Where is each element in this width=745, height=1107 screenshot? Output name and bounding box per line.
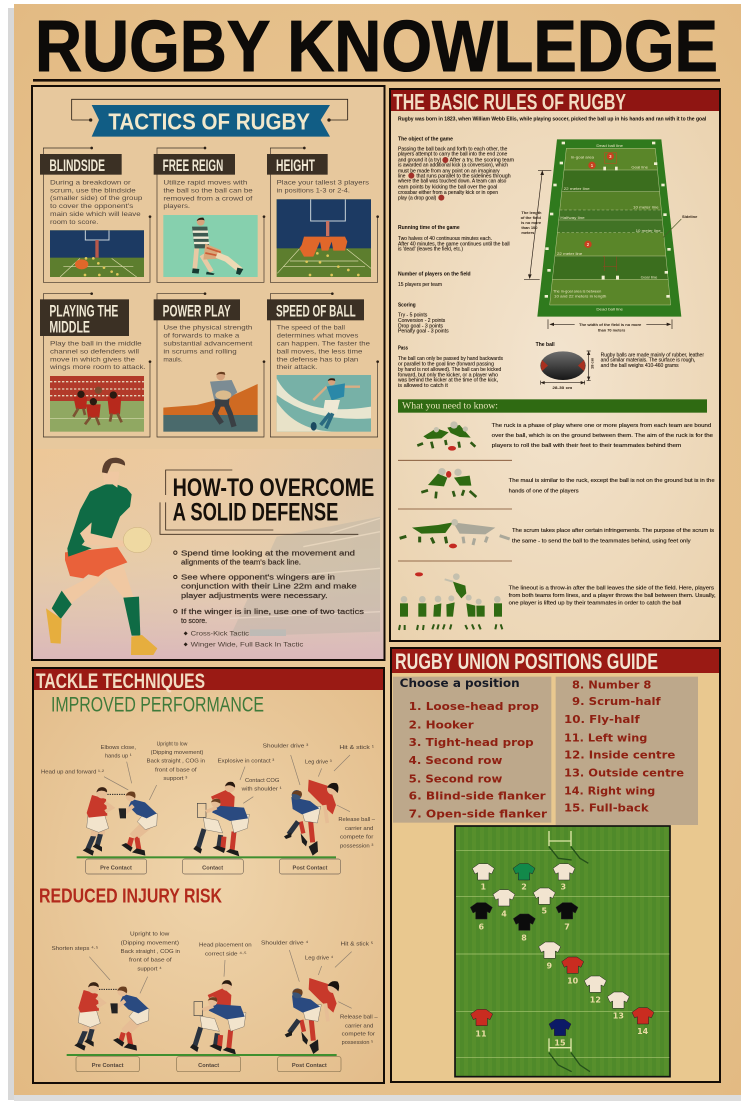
position list 1-7 — [393, 676, 551, 823]
pitch with numbered shirts: 2 — [521, 883, 527, 892]
text: object of the game: that runs parallel to the sidelines through — [416, 173, 511, 179]
diagram: improved performance tackle stages: hands up ¹ — [105, 753, 132, 759]
position list 8-15: 15. Full-back — [564, 801, 649, 814]
card: blindside: scrum, use the blindside — [50, 187, 136, 194]
bullet list: If the winger is in line, use one of two tactics — [181, 607, 364, 616]
diagram: improved performance tackle stages: Release ball – — [338, 817, 375, 823]
header: tackle techniques: TACKLE TECHNIQUES — [36, 670, 205, 693]
text: running time: is 'dead' (leaves the field, etc.) — [398, 247, 463, 253]
heading: how-to overcome: A SOLID DEFENSE — [173, 500, 338, 527]
diagram: improved performance tackle stages: possession ³ — [340, 843, 374, 849]
diagram: reduced injury risk tackle stages: Contact — [198, 1063, 219, 1069]
position list 1-7: 3. Tight-head prop — [409, 736, 534, 749]
text: pass: by hand is not allowed). The ball can be kicked — [398, 367, 501, 373]
position list 8-15: 13. Outside centre — [564, 766, 684, 779]
diagram: reduced injury risk tackle stages: Leg drive ⁴ — [305, 956, 334, 962]
card: power play: substantial advancement — [163, 341, 253, 348]
card: speed of ball: determines what moves — [277, 333, 359, 340]
card: speed of ball: The speed of the ball — [277, 325, 346, 332]
diagram: reduced injury risk tackle stages: Release ball – — [340, 1014, 378, 1020]
text: running time: After 40 minutes, the game continues until the ball — [398, 241, 510, 247]
card: power play: POWER PLAY — [163, 301, 231, 320]
position list 1-7: 7. Open-side flanker — [409, 808, 548, 821]
diagram: improved performance tackle stages: Shoulder drive ³ — [263, 744, 309, 750]
rugby field diagram: 22 meter line — [564, 187, 590, 191]
diagram: reduced injury risk tackle stages: support ⁴ — [137, 966, 162, 972]
position list 1-7: 5. Second row — [409, 772, 502, 785]
text: number of players: Number of players on the field — [398, 272, 471, 278]
rugby field diagram: 10 meter line — [636, 229, 661, 233]
position list 1-7: Choose a position — [400, 676, 520, 690]
diagram: reduced injury risk tackle stages: Head placement on — [199, 943, 252, 949]
panel: rugby union positions guide — [391, 648, 720, 1082]
the ball diagram: and similar materials. The surface is rough, — [601, 358, 695, 364]
heading: reduced injury risk: REDUCED INJURY RISK — [39, 886, 222, 908]
pitch with numbered shirts: 9 — [547, 961, 553, 970]
diagram: improved performance tackle stages: Post Contact — [293, 865, 328, 871]
card: playing the middle: PLAYING THE — [49, 301, 118, 320]
diagram: improved performance tackle stages: Back straight , COG in — [147, 759, 205, 765]
card: blindside: (smaller side) of the group — [50, 195, 143, 202]
rugby field diagram: Goal line — [631, 165, 648, 169]
diagram: improved performance tackle stages: compete for — [340, 835, 374, 841]
image: kicker — [277, 375, 371, 432]
pitch with numbered shirts: 7 — [564, 923, 570, 932]
text: object of the game: players attempt to carry the ball into the end zone — [398, 152, 507, 158]
text: object of the game: line — [398, 173, 405, 179]
pitch with numbered shirts: 3 — [561, 883, 566, 892]
heading: how-to overcome — [160, 470, 374, 534]
position list 8-15: 9. Scrum-half — [572, 695, 661, 708]
rugby field diagram: 2 — [587, 242, 590, 247]
text: object of the game: crossbar either from a penalty kick or in open — [398, 190, 498, 196]
field length annotation: of the field — [521, 215, 541, 220]
text: scoring: Penalty goal - 3 points — [398, 329, 449, 335]
the ball diagram: 28-30 cm — [552, 385, 573, 390]
card: playing the middle: move in which gives the — [50, 356, 135, 363]
image: tackle in open play — [163, 215, 258, 277]
diagram: reduced injury risk tackle stages: possession ⁵ — [342, 1040, 373, 1046]
card: blindside — [40, 147, 151, 282]
card: blindside: During a breakdown or — [50, 179, 132, 186]
card: free reign: the ball so the ball can be — [163, 187, 253, 194]
text: pass: forward, but only the kicker, or a player who — [398, 372, 498, 378]
diagram: reduced injury risk tackle stages: Upright to low — [130, 932, 170, 938]
text: object of the game: where the ball was touched down. A team can also — [398, 179, 506, 185]
rugby field diagram: 10 and 22 meters in length — [554, 294, 606, 298]
tactics banner: TACTICS OF RUGBY — [108, 109, 310, 135]
diagram: reduced injury risk tackle stages: front of base of — [129, 958, 172, 964]
text: scoring: Drop goal - 3 points — [398, 323, 443, 329]
card: blindside: main side which will leave — [50, 211, 141, 218]
text: pass: Pass — [398, 346, 408, 352]
bullet list: Spend time looking at the movement and — [181, 548, 355, 557]
card: free reign: removed from a crowd of — [163, 195, 253, 202]
rugby field diagram: 1 — [591, 163, 594, 168]
pitch with numbered shirts: 15 — [554, 1039, 566, 1048]
rugby field diagram: 3 — [609, 154, 612, 159]
diagram: improved performance tackle stages: carrier and — [345, 826, 373, 832]
the ball diagram: The ball — [536, 342, 555, 348]
text: number of players — [398, 272, 471, 288]
text: object of the game: play (a drop goal) — [398, 195, 437, 201]
rugby field diagram: Halfway line — [560, 216, 585, 220]
scrum — [400, 519, 714, 548]
card: height: Place your tallest 3 players — [277, 179, 370, 186]
pitch with numbered shirts: 1 — [481, 883, 486, 892]
diagram: reduced injury risk tackle stages: Back straight , COG in — [121, 949, 180, 955]
diagram: improved performance tackle stages: support ³ — [163, 776, 188, 782]
the ball diagram: Rugby balls are made mainly of rubber, leather — [601, 352, 704, 358]
bullet list — [174, 548, 364, 649]
field length annotation: The length — [521, 210, 542, 215]
ruck: over the ball, which is on the ground between them. The aim of the ruck is for the — [492, 433, 713, 439]
bullet list: See where opponent's wingers are in — [181, 573, 335, 582]
diagram: reduced injury risk tackle stages: compete for — [342, 1032, 375, 1038]
diagram: reduced injury risk tackle stages — [52, 932, 378, 1072]
bullet list: alignments of the team's back line. — [181, 557, 301, 566]
diagram: reduced injury risk tackle stages: Shoulder drive ⁴ — [261, 940, 309, 946]
card: blindside: to cover the opponent's — [50, 203, 134, 210]
card: height — [267, 147, 379, 282]
position list 1-7: 1. Loose-head prop — [409, 700, 539, 713]
the ball diagram: 18 cm — [590, 357, 595, 369]
rugby field diagram — [537, 139, 681, 317]
text: pass: is allowed to catch it — [398, 383, 449, 389]
what you need to know band — [398, 399, 707, 413]
diagram: reduced injury risk tackle stages: carrier and — [345, 1023, 373, 1029]
card: power play: Use the physical strength — [163, 325, 253, 332]
stadium backdrop — [230, 517, 380, 637]
rugby field diagram: The in-goal area is between — [553, 289, 601, 293]
lineout — [399, 572, 716, 630]
diagram: improved performance tackle stages: Head up and forward ¹·² — [41, 769, 104, 775]
pitch with numbered shirts: 13 — [613, 1011, 624, 1020]
pitch with numbered shirts: 4 — [501, 909, 507, 918]
card: free reign: Utilize rapid moves with — [163, 179, 248, 186]
bullet list: conjunction with their Line 22m and make — [181, 582, 357, 591]
position list 1-7: 2. Hooker — [409, 718, 474, 731]
card: playing the middle — [40, 292, 151, 437]
card: power play — [154, 292, 265, 437]
pitch with numbered shirts — [455, 826, 670, 1077]
rugby field diagram: Dead ball line — [596, 144, 623, 148]
image: ball carrier — [163, 372, 258, 432]
card: speed of ball: can happen. The faster the — [277, 341, 370, 348]
panel: basic rules of rugby — [390, 89, 720, 641]
position list 8-15: 12. Inside centre — [564, 748, 675, 761]
header: positions guide: RUGBY UNION POSITIONS GUIDE — [395, 649, 658, 674]
header: tackle techniques — [34, 669, 383, 693]
header: basic rules: THE BASIC RULES OF RUGBY — [393, 90, 626, 114]
position list 8-15: 11. Left wing — [564, 731, 647, 744]
panel: tactics of rugby — [32, 86, 384, 660]
maul: hands of one of the players — [509, 488, 579, 494]
image: goal line attack — [50, 230, 144, 277]
card: power play: of forwards to make a — [163, 333, 240, 340]
diagram: improved performance tackle stages: Upright to low — [157, 741, 187, 747]
diagram: reduced injury risk tackle stages: Post Contact — [292, 1063, 327, 1069]
pitch with numbered shirts: 10 — [567, 977, 579, 986]
text: object of the game: and ground it (a try) — [398, 157, 442, 163]
scrum: The scrum takes place after certain infringements. The purpose of the scrum is — [512, 528, 714, 534]
text: object of the game — [398, 137, 514, 201]
field length annotation: meters — [521, 230, 535, 235]
position list 8-15: 14. Right wing — [564, 784, 655, 797]
diagram: reduced injury risk tackle stages: Shorten steps ⁴·⁵ — [52, 946, 98, 952]
pitch with numbered shirts: 8 — [521, 933, 527, 942]
lineout: The lineout is a throw-in after the ball leaves the side of the field. Here, players — [509, 586, 714, 592]
card: speed of ball: their attack. — [277, 364, 318, 371]
diagram: improved performance tackle stages: Explosive in contact ³ — [218, 758, 275, 764]
position list 1-7: 4. Second row — [409, 754, 502, 767]
card: power play: mauls. — [163, 356, 183, 363]
diagram: improved performance tackle stages: Leg drive ³ — [305, 759, 332, 765]
field length annotation: than 100 — [521, 225, 538, 230]
card: playing the middle: Play the ball in the middle — [50, 341, 142, 348]
text: object of the game: After a try, the scoring team — [450, 157, 514, 163]
field width annotation: The width of the field is no more — [579, 322, 642, 327]
text: object of the game: The object of the game — [398, 137, 453, 143]
heading: how-to overcome: HOW-TO OVERCOME — [173, 475, 374, 502]
position list 8-15: 10. Fly-half — [564, 713, 640, 726]
image: lineout of tall players — [277, 199, 371, 277]
card: speed of ball: the defense has to plan — [277, 356, 359, 363]
tactics banner — [72, 99, 348, 137]
sideline annotation — [663, 214, 698, 238]
text: running time: Running time of the game — [398, 225, 460, 231]
field width annotation: than 70 meters — [598, 327, 626, 332]
image: players in stadium — [50, 376, 144, 432]
card: speed of ball: SPEED OF BALL — [276, 301, 356, 320]
text: scoring: Scoring — [398, 303, 416, 309]
field width annotation — [548, 319, 672, 332]
diagram: improved performance tackle stages: Contact — [202, 865, 223, 871]
the ball diagram — [536, 342, 704, 390]
ruck: The ruck is a phase of play where one or more players from each team are bound — [492, 423, 711, 429]
card: blindside: BLINDSIDE — [49, 156, 105, 175]
text: object of the game: is awarded an additional kick (a conversion), which — [398, 163, 508, 169]
field length annotation: is no more — [521, 220, 542, 225]
text: pass: The ball can only be passed by hand backwards — [398, 356, 503, 362]
sideline annotation: Sideline — [682, 214, 698, 219]
maul — [421, 468, 715, 498]
bullet list: player adjustments were necessary. — [181, 591, 328, 600]
pitch with numbered shirts: 6 — [479, 923, 485, 932]
diagram: improved performance tackle stages: Hit & stick ¹ — [339, 745, 374, 751]
text: scoring: Conversion - 2 points — [398, 318, 446, 324]
position list 1-7: 6. Blind-side flanker — [409, 790, 546, 803]
card: free reign: FREE REIGN — [163, 156, 223, 175]
card: speed of ball: ball moves, the less time — [277, 349, 363, 356]
text: pass — [398, 346, 503, 389]
rugby field diagram: In-goal area — [571, 155, 595, 159]
text: scoring: Try - 5 points — [398, 313, 428, 319]
text: running time: Two halves of 40 continuous minutes each. — [398, 236, 492, 242]
ruck: players to roll the ball with their feet to their teammates behind them — [492, 443, 682, 449]
diagram: reduced injury risk tackle stages: Hit & stick ⁵ — [341, 942, 373, 948]
card: power play: in scrums and rolling — [163, 349, 237, 356]
card: playing the middle: wings more room to attack. — [49, 364, 146, 371]
panel: tackle techniques — [33, 668, 384, 1083]
text: pass: was behind the kicker at the time of the kick, — [398, 378, 498, 384]
card: playing the middle: channel so defenders will — [50, 349, 140, 356]
diagram: improved performance tackle stages: (Dipping movement) — [151, 750, 204, 756]
text: pass: or parallel to the goal line (forward passing — [398, 361, 494, 367]
text: scoring — [398, 303, 449, 335]
text: number of players: 15 players per team — [398, 282, 442, 288]
diagram: improved performance tackle stages — [41, 741, 375, 874]
diagram: reduced injury risk tackle stages: (Dipping movement) — [121, 940, 179, 946]
bullet list: to score. — [181, 616, 207, 625]
intro sentence: Rugby was born in 1823, when William Webb Ellis, while playing soccer, picked the ball up in his hands and ran with it to the goal — [398, 117, 707, 123]
pitch with numbered shirts: 5 — [542, 907, 547, 916]
card: blindside: room to score. — [50, 219, 98, 226]
text: running time — [398, 225, 510, 253]
text: object of the game: Passing the ball back and forth to each other, the — [398, 146, 507, 152]
diagram: improved performance tackle stages: front of base of — [155, 767, 197, 773]
diagram: reduced injury risk tackle stages: correct side ⁴·⁵ — [205, 951, 247, 957]
position list 8-15: 8. Number 8 — [572, 678, 651, 691]
what you need to know band: What you need to know: — [402, 401, 498, 411]
bullet list: Winger Wide, Full Back In Tactic — [191, 642, 303, 649]
rugby field diagram: Dead ball line — [596, 308, 623, 312]
text: object of the game: earn points by kicking the ball over the goal — [398, 184, 497, 190]
pitch with numbered shirts: 12 — [590, 995, 601, 1004]
card: free reign — [154, 147, 265, 282]
position list 8-15 — [556, 677, 698, 825]
card: speed of ball — [267, 292, 379, 437]
field length annotation — [521, 170, 551, 279]
pitch with numbered shirts: 11 — [475, 1029, 487, 1038]
heading: improved performance: IMPROVED PERFORMANCE — [51, 694, 264, 716]
player illustration — [46, 458, 157, 655]
diagram: reduced injury risk tackle stages: Pre Contact — [92, 1063, 124, 1069]
bullet list: Cross-Kick Tactic — [191, 631, 249, 638]
the ball diagram: and the ball weighs 410-460 grams — [601, 363, 679, 369]
rugby field diagram: Goal line — [641, 276, 657, 280]
card: height: in positions 1-3 or 2-4. — [277, 187, 350, 194]
text: object of the game: must be made from any point on an imaginary — [398, 168, 500, 174]
pitch with numbered shirts: 14 — [637, 1027, 649, 1036]
card: free reign: players. — [163, 203, 190, 210]
how-to overcome section — [33, 449, 384, 659]
maul: The maul is similar to the ruck, except the ball is not on the ground but is in the — [509, 478, 715, 484]
rugby field diagram: 22 meter line — [557, 252, 582, 256]
card: playing the middle: MIDDLE — [49, 318, 90, 337]
ruck — [417, 421, 713, 451]
lineout: one player is lifted up by their teammates in order to catch the ball — [509, 600, 681, 606]
diagram: improved performance tackle stages: with shoulder ¹ — [242, 787, 282, 793]
card: height: HEIGHT — [276, 156, 315, 175]
diagram: improved performance tackle stages: Pre Contact — [100, 865, 132, 871]
scrum: the same - to send the ball to the teammates behind, using feet only — [512, 538, 691, 544]
lineout: from both teams form lines, and a player throws the ball between them. Usually, — [509, 593, 716, 599]
diagram: improved performance tackle stages: Elbows close, — [101, 745, 136, 751]
diagram: improved performance tackle stages: Contact COG — [245, 778, 279, 784]
rugby field diagram: 10 meter line — [633, 206, 659, 210]
